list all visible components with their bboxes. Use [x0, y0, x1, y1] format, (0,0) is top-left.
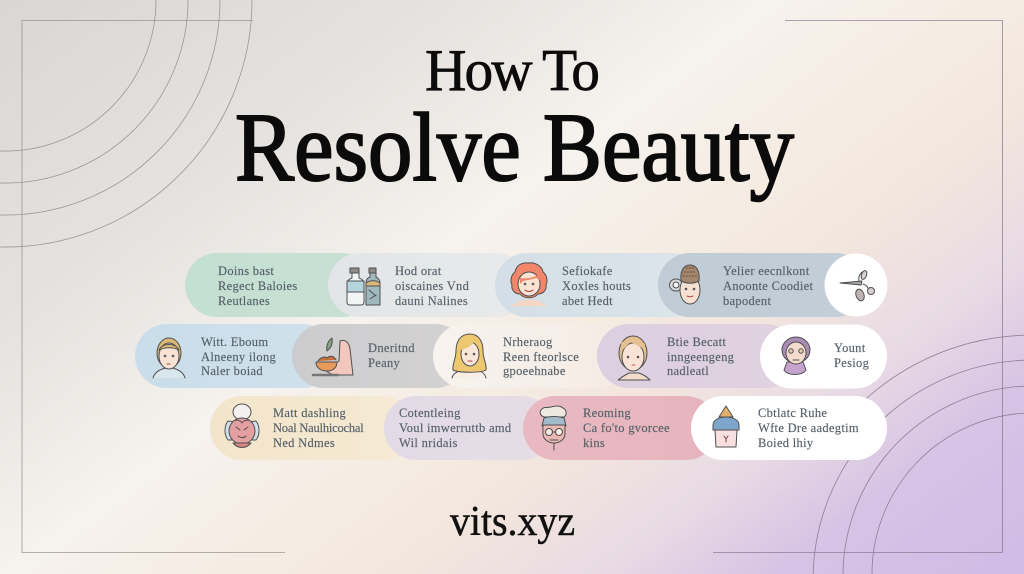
pill: light blue: Alneeny ilong [201, 350, 277, 364]
icon: hand with bowl [313, 338, 353, 375]
pill: pink: kins [583, 436, 605, 450]
pill: lavender: Btie Becatt [667, 335, 726, 349]
pill: yellow: Matt dashling [273, 406, 346, 420]
pill: bottles [328, 253, 528, 317]
pill: blue: abet Hedt [562, 294, 613, 308]
pill: bottles: Hod orat [395, 264, 442, 278]
pill: pale lavender: Wil nridais [399, 436, 458, 450]
pill: light blue: Naler boiad [201, 364, 263, 378]
icon: boy [618, 336, 650, 380]
pill: slate: bapodent [723, 294, 771, 308]
pill: blue: Xoxles houts [562, 279, 631, 293]
pill: yellow [210, 396, 415, 460]
pill: white [691, 396, 887, 460]
icon: red-haired face [510, 263, 548, 306]
icon: cream bottle [713, 406, 739, 447]
pill: pink: Reoming [583, 406, 631, 420]
pill: blue [495, 253, 705, 317]
pill: pale lavender: Voul imwerruttb amd [399, 421, 512, 435]
pill: cream: Reen fteorlsce [503, 350, 579, 364]
pill: light blue: Witt. Eboum [201, 335, 268, 349]
row 2 of steps [135, 324, 887, 388]
row 3 of steps [210, 396, 887, 460]
pill: pink: Ca fo'to gvorcee [583, 421, 670, 435]
pill: bottles: dauni Nalines [395, 294, 468, 308]
icon: pink face with hands [225, 404, 259, 448]
pill: lavender: inngeengeng [667, 350, 735, 364]
pill: bottles: oiscaines Vnd [395, 279, 470, 293]
pill: cream [433, 324, 628, 388]
title: How To [425, 37, 598, 103]
pill: grey: Dneritnd [368, 341, 415, 355]
pill: lavender: nadleatl [667, 364, 709, 378]
pill: slate: Yelier eecnlkont [723, 264, 810, 278]
pill: lavender [597, 324, 797, 388]
row 1 of steps [185, 253, 888, 317]
pill: white scissors [824, 254, 888, 316]
pill: yellow: Noal Naulhicochal [273, 421, 364, 435]
pill: cream: gpoeehnabe [503, 364, 566, 378]
pill: white: Cbtlatc Ruhe [758, 406, 827, 420]
pill: pale lavender: Cotentleing [399, 406, 461, 420]
title: Resolve Beauty [235, 94, 794, 202]
icon: egg face [670, 265, 700, 304]
pill: cream: Nrheraog [503, 335, 553, 349]
pill: white: Boied lhiy [758, 436, 814, 450]
icon: bottles [347, 268, 380, 305]
icon: blonde woman [452, 334, 486, 378]
pill: slate: Anoonte Coodiet [723, 279, 813, 293]
pill: white young [760, 324, 887, 388]
pill: slate [658, 253, 868, 317]
icon: scissors [840, 270, 874, 302]
pill: white young: Pesiog [834, 356, 870, 370]
pill: pink [523, 396, 718, 460]
pill: blue: Sefiokafe [562, 264, 613, 278]
pill: yellow: Ned Ndmes [273, 436, 335, 450]
icon: woman with bun [153, 338, 185, 378]
website footer: vits.xyz [450, 499, 575, 545]
icon: face with glasses and turban [540, 406, 566, 450]
pill: white young: Yount [834, 341, 866, 355]
pill: grey [292, 324, 467, 388]
pill: green: Doins bast [218, 264, 274, 278]
pill: green: Regect Baloies [218, 279, 298, 293]
pill: pale lavender [384, 396, 554, 460]
pill: green [185, 253, 375, 317]
pill: white: Wfte Dre aadegtim [758, 421, 859, 435]
pill: light blue [135, 324, 335, 388]
icon: purple-haired face [782, 337, 810, 374]
title [235, 37, 794, 202]
pill: grey: Peany [368, 356, 400, 370]
pill: green: Reutlanes [218, 294, 270, 308]
